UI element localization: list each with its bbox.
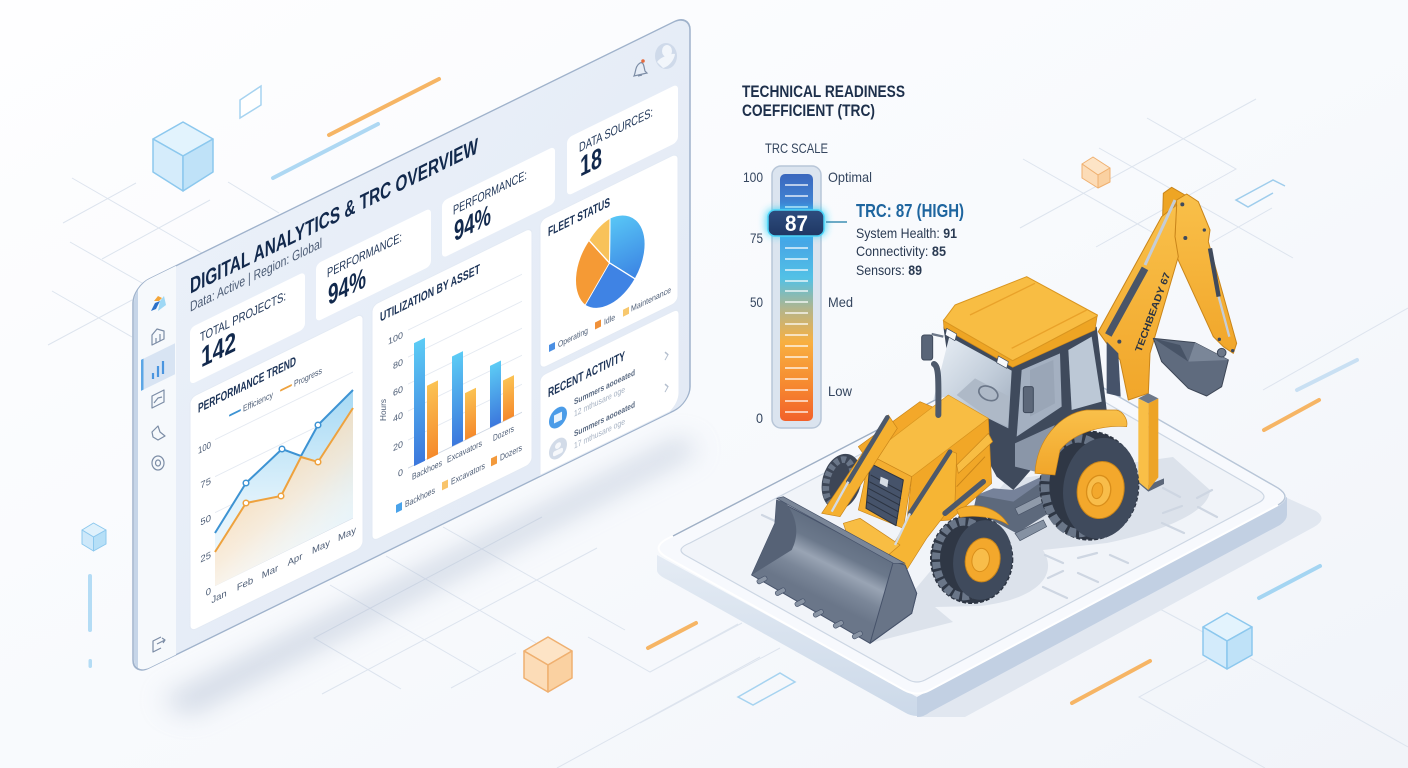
KPI card: performance 1: PERFORMANCE: xyxy=(327,230,402,281)
outline rectangle bottom xyxy=(738,673,795,705)
bars xyxy=(414,294,514,466)
bucket teeth xyxy=(756,575,863,640)
card: utilization by asset: Backhoes xyxy=(412,458,442,483)
scale numbers: 0 xyxy=(756,410,763,426)
mirror xyxy=(922,335,933,360)
KPI card: data sources: 18 xyxy=(580,141,602,183)
scale words: Med xyxy=(828,294,853,310)
panel body xyxy=(133,14,690,676)
TRC readout xyxy=(856,201,964,278)
card: fleet status: Operating xyxy=(558,325,588,349)
outline bracket right xyxy=(1236,180,1285,207)
card: performance trend: Jan xyxy=(211,588,227,606)
activity item 2: 17 mthusare oge xyxy=(574,416,625,451)
gauge ticks xyxy=(785,185,808,412)
small blue cube bottom right xyxy=(1203,613,1252,669)
KPI card: data sources: DATA SOURCES: xyxy=(579,105,653,155)
card: performance trend: May xyxy=(338,525,356,544)
card: utilization by asset: 60 xyxy=(393,384,403,399)
engine hood xyxy=(858,364,992,528)
card: utilization by asset: 20 xyxy=(393,439,403,454)
activity item 2 xyxy=(549,399,635,463)
rear bucket xyxy=(1153,338,1228,396)
decorative blue cube xyxy=(153,122,213,191)
KPI card: total projects xyxy=(190,272,305,385)
activity item 1 xyxy=(549,367,635,432)
decorative accent lines top xyxy=(273,79,439,178)
card: performance trend: 75 xyxy=(200,476,211,492)
rear fender xyxy=(1035,410,1127,475)
exhaust stack xyxy=(934,364,938,415)
card: performance trend: 50 xyxy=(200,513,211,529)
Hours axis label: Hours xyxy=(378,399,388,421)
scale numbers: 100 xyxy=(743,169,763,185)
gauge tube xyxy=(772,166,821,428)
sidebar icons xyxy=(152,329,165,652)
rear wheel xyxy=(1040,432,1145,544)
card: fleet status: FLEET STATUS xyxy=(548,195,610,239)
scale label: TRC SCALE xyxy=(765,140,828,156)
card: performance trend: May xyxy=(312,538,330,557)
stabilizer post xyxy=(1137,393,1164,492)
scale words xyxy=(828,169,872,399)
rear digger arm xyxy=(1098,187,1237,400)
card: fleet status: Maintenance xyxy=(631,285,671,314)
cab xyxy=(922,277,1107,490)
card: performance trend: Apr xyxy=(288,551,303,569)
card: recent activity xyxy=(540,308,679,475)
leader line xyxy=(826,221,847,223)
user avatar xyxy=(655,43,677,69)
card: utilization by asset: Excavators xyxy=(451,461,485,488)
scale numbers: 50 xyxy=(750,294,763,310)
cab roof xyxy=(943,315,1097,367)
TRC readout: Sensors: 89 xyxy=(856,262,922,278)
line chart series xyxy=(215,390,353,586)
card: performance trend: Efficiency xyxy=(243,390,273,415)
KPI card: data sources xyxy=(567,84,678,196)
score badge: 87 xyxy=(785,211,808,236)
KPI card: performance 2: PERFORMANCE: xyxy=(453,167,527,218)
pie chart xyxy=(576,201,645,322)
scale words: Low xyxy=(828,383,853,399)
KPI card: performance 2: 94% xyxy=(454,199,491,248)
TRC readout: System Health: 91 xyxy=(856,225,957,241)
card: utilization by asset: Dozers xyxy=(493,423,514,444)
activity item 1: Summers aooeated xyxy=(574,367,635,407)
card: performance trend: Feb xyxy=(237,575,254,594)
card: performance trend: 25 xyxy=(200,550,211,566)
TRC scale gauge xyxy=(743,140,872,428)
front fender xyxy=(957,506,1008,525)
activity item 2: Summers aooeated xyxy=(574,399,635,439)
dashboard skewed content xyxy=(190,34,679,647)
card: utilization by asset: 80 xyxy=(393,357,403,372)
KPI card: performance 2 xyxy=(442,146,555,258)
card: utilization by asset: UTILIZATION BY ASSET xyxy=(380,261,480,325)
card: utilization by asset: 100 xyxy=(388,330,403,348)
card: performance trend: Mar xyxy=(262,563,279,582)
boom label: TECHBEADY 67 xyxy=(1134,271,1173,354)
card: utilization by asset: Dozers xyxy=(500,443,522,464)
card: performance trend: 100 xyxy=(198,440,211,457)
chevrons xyxy=(665,351,668,392)
orange cube bottom xyxy=(524,637,572,692)
platform floor shadow xyxy=(917,497,1322,717)
ground markings xyxy=(762,488,1217,598)
KPI card: total projects: TOTAL PROJECTS: xyxy=(200,289,286,345)
grille xyxy=(866,463,903,526)
notification bell xyxy=(634,59,647,76)
backhoe loader xyxy=(752,187,1237,643)
card: recent activity: RECENT ACTIVITY xyxy=(548,348,625,400)
card: utilization by asset: Excavators xyxy=(447,438,482,466)
scale words: Optimal xyxy=(828,169,872,185)
cab lights xyxy=(945,328,957,341)
chassis and steps xyxy=(973,477,1048,541)
card: performance trend: Progress xyxy=(294,366,322,390)
front wheel xyxy=(931,515,1017,604)
front loader bucket xyxy=(752,497,917,643)
accent line bottom centre xyxy=(648,623,696,648)
activity item 1: 12 mthusare oge xyxy=(574,384,625,419)
platform xyxy=(657,352,1322,717)
card: utilization by asset: 40 xyxy=(393,410,403,425)
orange cube right xyxy=(1082,157,1110,188)
KPI card: performance 1: 94% xyxy=(328,262,366,312)
logo icon xyxy=(151,296,166,311)
scale numbers xyxy=(743,169,763,426)
TRC readout: Connectivity: 85 xyxy=(856,243,946,259)
accent lines right xyxy=(1072,360,1357,703)
score badge xyxy=(766,209,826,236)
subtitle: Data: Active | Region: Global xyxy=(190,236,322,316)
dashboard panel xyxy=(133,14,690,676)
vertical accent bar xyxy=(88,574,92,668)
card: utilization by asset: 0 xyxy=(398,467,403,480)
card: utilization by asset: Backhoes xyxy=(405,485,435,510)
TRC heading: COEFFICIENT (TRC) xyxy=(742,101,875,120)
TRC heading: TECHNICAL READINESS xyxy=(742,82,905,101)
cab windows xyxy=(933,337,1012,428)
machine ground shadow xyxy=(870,457,1210,643)
card: utilization by asset xyxy=(372,227,532,542)
panel shadow xyxy=(160,438,700,715)
card: performance trend: 0 xyxy=(206,586,211,599)
title: DIGITAL ANALYTICS & TRC OVERVIEW xyxy=(190,133,478,299)
far front wheel xyxy=(816,449,868,514)
decorative outline square xyxy=(240,86,261,118)
loader arms xyxy=(822,415,993,570)
scale numbers: 75 xyxy=(750,230,763,246)
card: performance trend xyxy=(190,313,363,632)
card: fleet status xyxy=(540,153,678,369)
small blue cube left xyxy=(82,523,106,551)
KPI card: total projects: 142 xyxy=(201,326,236,374)
card: fleet status: Idle xyxy=(604,312,615,327)
card: performance trend: PERFORMANCE TREND xyxy=(198,354,296,416)
KPI card: performance 1 xyxy=(316,208,431,322)
TRC readout: TRC: 87 (HIGH) xyxy=(856,201,964,221)
